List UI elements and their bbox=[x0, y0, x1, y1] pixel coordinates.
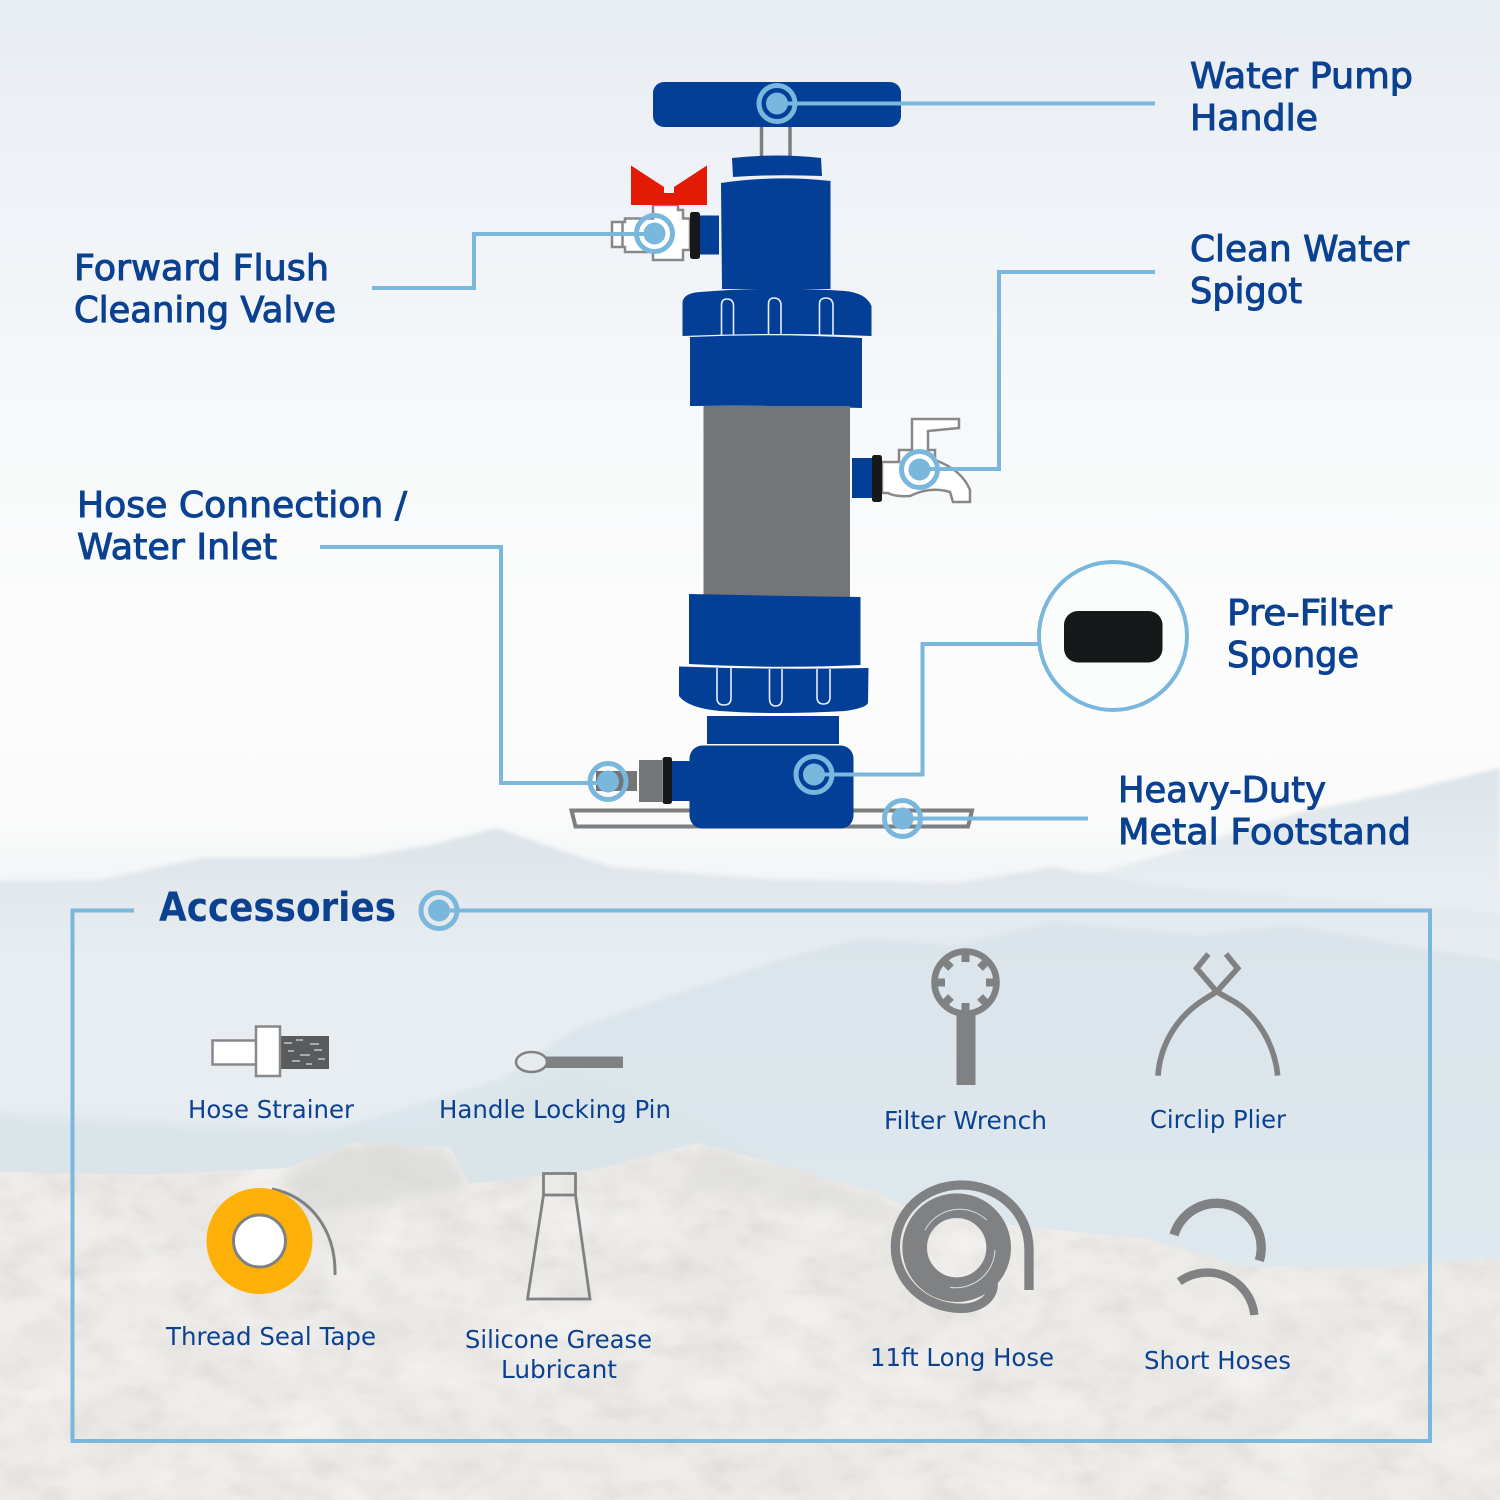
label: forward flush cleaning valve bbox=[74, 248, 336, 331]
red valve handle bbox=[631, 166, 707, 205]
icon: strainer bbox=[212, 1026, 329, 1076]
caption: Short Hoses bbox=[1144, 1346, 1291, 1375]
icon: coiled hose bbox=[895, 1185, 1029, 1308]
callout leader lines bbox=[320, 104, 1155, 818]
lower housing bbox=[689, 594, 860, 667]
upper collar with ribs bbox=[682, 289, 872, 336]
accessory: thread seal tape bbox=[165, 1188, 376, 1351]
accessory: hose strainer bbox=[188, 1026, 355, 1124]
spigot connector bbox=[852, 458, 872, 498]
accessory: silicone grease lubricant bbox=[465, 1174, 652, 1384]
hose inlet fitting bbox=[596, 757, 690, 804]
caption: Thread Seal Tape bbox=[165, 1322, 376, 1351]
caption bbox=[465, 1325, 652, 1384]
accessories heading: Accessories bbox=[159, 885, 396, 931]
pump top cap bbox=[732, 156, 822, 177]
label: hose connection water inlet bbox=[77, 485, 408, 568]
caption: Circlip Plier bbox=[1150, 1105, 1287, 1134]
accessory: short hoses bbox=[1144, 1203, 1291, 1375]
marker: handle bbox=[759, 86, 795, 122]
pump assembly bbox=[572, 82, 972, 828]
label: clean water spigot: Clean Water bbox=[1190, 229, 1409, 270]
marker: base bbox=[796, 756, 832, 792]
spigot body bbox=[882, 419, 970, 502]
marker: inlet bbox=[590, 764, 626, 800]
base block bbox=[690, 746, 854, 828]
caption: Handle Locking Pin bbox=[439, 1095, 671, 1124]
grey filter cartridge bbox=[704, 406, 850, 597]
inlet gasket bbox=[662, 757, 672, 804]
black gasket bbox=[690, 212, 700, 259]
upper body bbox=[721, 178, 830, 289]
accessories marker bbox=[421, 892, 457, 928]
label: clean water spigot bbox=[1190, 229, 1409, 312]
label: pre-filter sponge: Pre-Filter bbox=[1227, 593, 1392, 634]
caption: Lubricant bbox=[501, 1355, 617, 1384]
accessory: circlip plier bbox=[1150, 954, 1287, 1134]
label: water pump handle: Handle bbox=[1190, 98, 1318, 139]
callout markers bbox=[590, 86, 938, 836]
marker: spigot bbox=[902, 452, 938, 488]
label: pre-filter sponge: Sponge bbox=[1227, 635, 1359, 676]
icon: tube bbox=[528, 1174, 590, 1299]
neck bbox=[707, 716, 839, 744]
marker: footstand bbox=[884, 800, 920, 836]
accessories frame bbox=[72, 910, 1430, 1441]
label: hose connection water inlet: Water Inlet bbox=[77, 527, 277, 568]
blue inlet neck bbox=[672, 761, 690, 801]
upper housing bbox=[690, 335, 862, 408]
label: hose connection water inlet: Hose Connection / bbox=[77, 485, 408, 526]
accessory: filter wrench bbox=[884, 952, 1047, 1135]
spigot gasket bbox=[872, 455, 882, 502]
handle stems bbox=[762, 126, 790, 158]
caption: Hose Strainer bbox=[188, 1095, 355, 1124]
marker: flush valve bbox=[636, 216, 672, 252]
forward flush valve bbox=[612, 166, 719, 260]
grey fitting bbox=[639, 760, 662, 802]
caption: Filter Wrench bbox=[884, 1106, 1047, 1135]
lower collar with ribs bbox=[679, 666, 868, 713]
clean water spigot bbox=[852, 419, 970, 502]
icon: tape roll bbox=[206, 1188, 335, 1294]
label: clean water spigot: Spigot bbox=[1190, 271, 1302, 312]
water pump handle bbox=[653, 82, 901, 127]
blue connector bbox=[700, 216, 719, 254]
valve body bbox=[612, 205, 690, 260]
label: heavy-duty metal footstand bbox=[1118, 770, 1411, 853]
icon: pin bbox=[516, 1052, 623, 1072]
pre-filter sponge callout bbox=[1039, 562, 1187, 710]
footstand bbox=[572, 810, 972, 826]
caption: 11ft Long Hose bbox=[870, 1343, 1054, 1372]
label: forward flush cleaning valve: Cleaning Valve bbox=[74, 290, 336, 331]
label: heavy-duty metal footstand: Metal Footstand bbox=[1118, 812, 1411, 853]
icon: plier bbox=[1158, 954, 1278, 1076]
label: water pump handle: Water Pump bbox=[1190, 56, 1413, 97]
accessory: long hose bbox=[870, 1185, 1054, 1372]
icon: wrench bbox=[934, 952, 996, 1085]
label: water pump handle bbox=[1190, 56, 1413, 139]
accessory: handle locking pin bbox=[439, 1052, 671, 1124]
label: pre-filter sponge bbox=[1227, 593, 1392, 676]
label: heavy-duty metal footstand: Heavy-Duty bbox=[1118, 770, 1326, 811]
caption: Silicone Grease bbox=[465, 1325, 652, 1354]
thin grey barb bbox=[596, 771, 637, 791]
label: forward flush cleaning valve: Forward Flush bbox=[74, 248, 329, 289]
icon: two hose arcs bbox=[1174, 1203, 1261, 1315]
